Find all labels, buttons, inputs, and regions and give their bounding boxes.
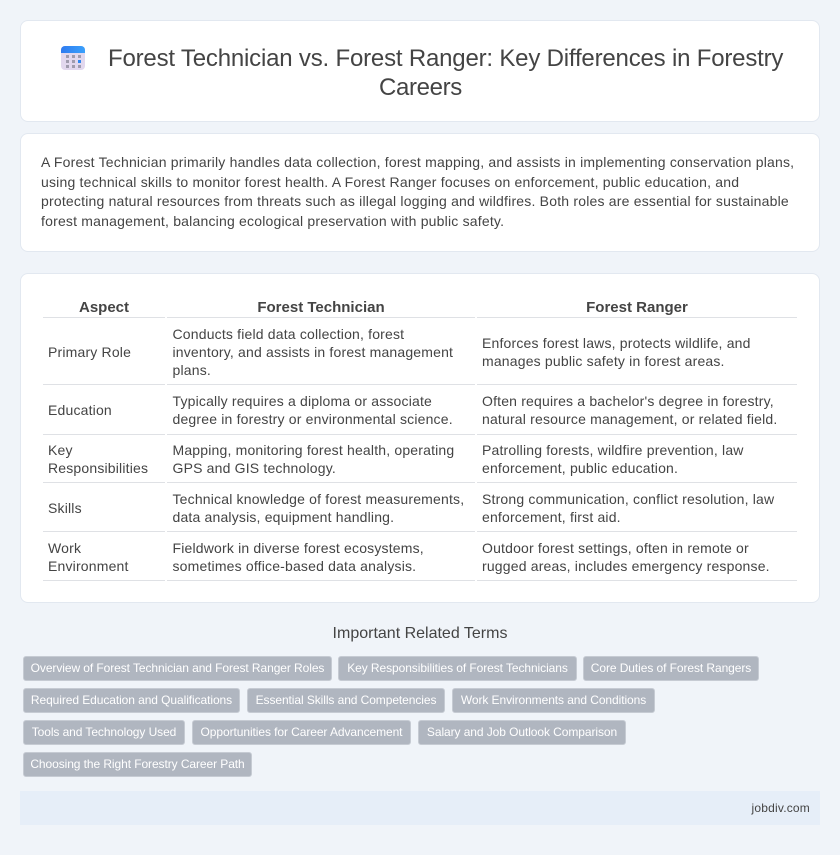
tag: Choosing the Right Forestry Career Path <box>30 757 245 771</box>
row: skills: Technical knowledge of forest measurements, <box>172 491 464 507</box>
tag <box>452 688 655 713</box>
tag <box>23 688 240 713</box>
row: skills <box>43 491 797 532</box>
row: work environment: rugged areas, includes emergency response. <box>482 558 770 574</box>
row: work environment: Outdoor forest settings, often in remote or <box>482 540 749 556</box>
row: key responsibilities: Mapping, monitoring forest health, operating <box>172 442 454 458</box>
row: skills: Skills <box>48 500 82 516</box>
row: primary role: Primary Role <box>48 344 131 360</box>
row: primary role: plans. <box>172 362 211 378</box>
table header row: Forest Technician <box>257 299 385 316</box>
row: work environment: Work <box>48 540 81 556</box>
icon: calendar <box>61 46 85 70</box>
tag: Salary and Job Outlook Comparison <box>427 725 617 739</box>
row: primary role: manages public safety in forest areas. <box>482 353 725 369</box>
row: key responsibilities: enforcement, public education. <box>482 460 678 476</box>
row: work environment <box>43 540 797 581</box>
intro paragraph: forest management, balancing ecological preservation with public safety. <box>41 213 504 229</box>
intro paragraph: using technical skills to monitor forest health. A Forest Ranger focuses on enforcement, public education, and <box>41 174 739 190</box>
row: education: Often requires a bachelor's degree in forestry, <box>482 393 774 409</box>
row: primary role: Enforces forest laws, protects wildlife, and <box>482 335 751 351</box>
title: Forest Technician vs. Forest Ranger: Key Differences in Forestry <box>108 45 783 72</box>
row: key responsibilities <box>43 442 797 483</box>
tag: Required Education and Qualifications <box>31 693 232 707</box>
row: skills: Strong communication, conflict resolution, law <box>482 491 774 507</box>
tag: Opportunities for Career Advancement <box>201 725 402 739</box>
intro paragraph: protecting natural resources from threats such as illegal logging and wildfires. Both roles are essential for sustainable <box>41 193 789 209</box>
tag <box>23 656 332 681</box>
footer site name: jobdiv.com <box>752 801 810 815</box>
tag: Work Environments and Conditions <box>461 693 646 707</box>
intro paragraph: A Forest Technician primarily handles data collection, forest mapping, and assists in implementing conservation plans, <box>41 154 794 170</box>
title: Careers <box>379 74 462 101</box>
tag <box>418 720 626 745</box>
row: primary role <box>43 326 797 385</box>
tag: Tools and Technology Used <box>32 725 176 739</box>
row: education: degree in forestry or environmental science. <box>172 411 453 427</box>
row: skills: enforcement, first aid. <box>482 509 621 525</box>
tag: Essential Skills and Competencies <box>256 693 436 707</box>
row: key responsibilities: Key <box>48 442 73 458</box>
row: education: Typically requires a diploma or associate <box>172 393 432 409</box>
tag: Overview of Forest Technician and Forest Ranger Roles <box>31 661 324 675</box>
tag: Key Responsibilities of Forest Technicians <box>347 661 568 675</box>
tag <box>338 656 577 681</box>
row: primary role: Conducts field data collection, forest <box>172 326 404 342</box>
related terms heading: Important Related Terms <box>333 625 507 642</box>
row: education: Education <box>48 402 112 418</box>
row: education: natural resource management, or related field. <box>482 411 777 427</box>
table header row <box>43 299 797 318</box>
tag <box>583 656 759 681</box>
row: work environment: Fieldwork in diverse forest ecosystems, <box>172 540 424 556</box>
table header row: Aspect <box>79 299 129 316</box>
row: work environment: Environment <box>48 558 129 574</box>
table header row: Forest Ranger <box>586 299 688 316</box>
tag <box>192 720 411 745</box>
tag: Core Duties of Forest Rangers <box>591 661 751 675</box>
intro paragraph <box>41 154 794 229</box>
row: key responsibilities: Patrolling forests, wildfire prevention, law <box>482 442 744 458</box>
intro text panel <box>20 133 820 252</box>
tag <box>23 720 185 745</box>
related terms tags <box>23 656 759 777</box>
row: key responsibilities: GPS and GIS technology. <box>172 460 336 476</box>
footer bar <box>20 791 820 825</box>
row: primary role: inventory, and assists in forest management <box>172 344 453 360</box>
tag <box>247 688 445 713</box>
tag <box>23 752 252 777</box>
row: work environment: sometimes office-based data analysis. <box>172 558 416 574</box>
header panel <box>20 20 820 122</box>
title <box>108 45 784 101</box>
row: education <box>43 393 797 435</box>
row: key responsibilities: Responsibilities <box>48 460 148 476</box>
row: skills: data analysis, equipment handling. <box>172 509 394 525</box>
comparison table panel <box>20 273 820 603</box>
